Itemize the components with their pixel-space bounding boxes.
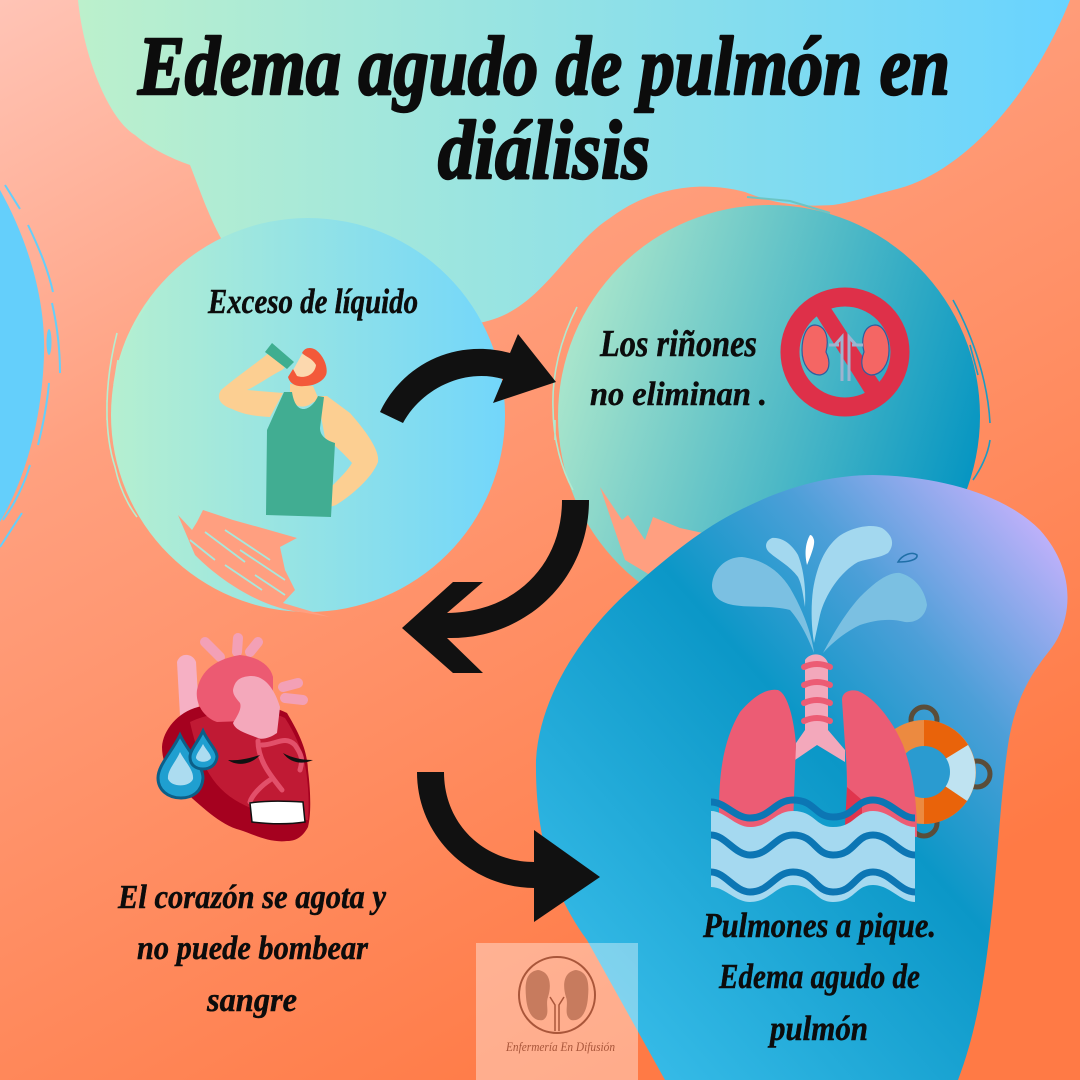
text: pulmones a pique: pulmón <box>767 1009 868 1048</box>
title: diálisis <box>438 104 650 197</box>
text: el corazón se agota: sangre <box>206 982 297 1019</box>
text: pulmones a pique <box>702 906 936 1048</box>
icon: tired heart <box>158 638 313 841</box>
text: pulmones a pique: Edema agudo de <box>718 957 920 996</box>
title <box>137 20 950 197</box>
icon: prohibited kidneys <box>790 297 900 407</box>
right circle with brushed edge <box>553 197 990 627</box>
text: el corazón se agota <box>117 879 387 1019</box>
panel: los riñones no eliminan <box>553 197 990 627</box>
arrow: kidneys to heart <box>402 500 589 673</box>
text: pulmones a pique: Pulmones a pique. <box>702 906 936 945</box>
left circle with brushed edge <box>107 218 505 617</box>
logo: enfermeria en difusion <box>476 943 638 1080</box>
panel: pulmones a pique <box>536 475 1068 1080</box>
icon: water waves <box>711 800 915 902</box>
arrow: liquid to kidneys <box>380 334 556 423</box>
text: no eliminan: no eliminan . <box>590 376 767 413</box>
text: exceso de liquido: Exceso de líquido <box>207 282 418 321</box>
icon: water splash <box>712 526 927 653</box>
text: los riñones: Los riñones <box>599 323 757 365</box>
logo: enfermeria en difusion: Enfermería En Difusión <box>505 1039 615 1054</box>
left edge blue circle <box>0 185 60 547</box>
panel: exceso de liquido <box>107 218 505 617</box>
icon: man drinking <box>219 343 378 517</box>
title: Edema agudo de pulmón en <box>137 20 950 113</box>
top header blob <box>78 0 1070 328</box>
icon: lungs and trachea <box>719 654 917 837</box>
text: el corazón se agota: El corazón se agota y <box>117 879 387 916</box>
background blob <box>536 475 1068 1080</box>
arrow: heart to lungs <box>417 772 600 922</box>
icon: life ring <box>872 707 990 836</box>
panel: el corazón <box>117 638 387 1019</box>
text: el corazón se agota: no puede bombear <box>137 930 369 967</box>
